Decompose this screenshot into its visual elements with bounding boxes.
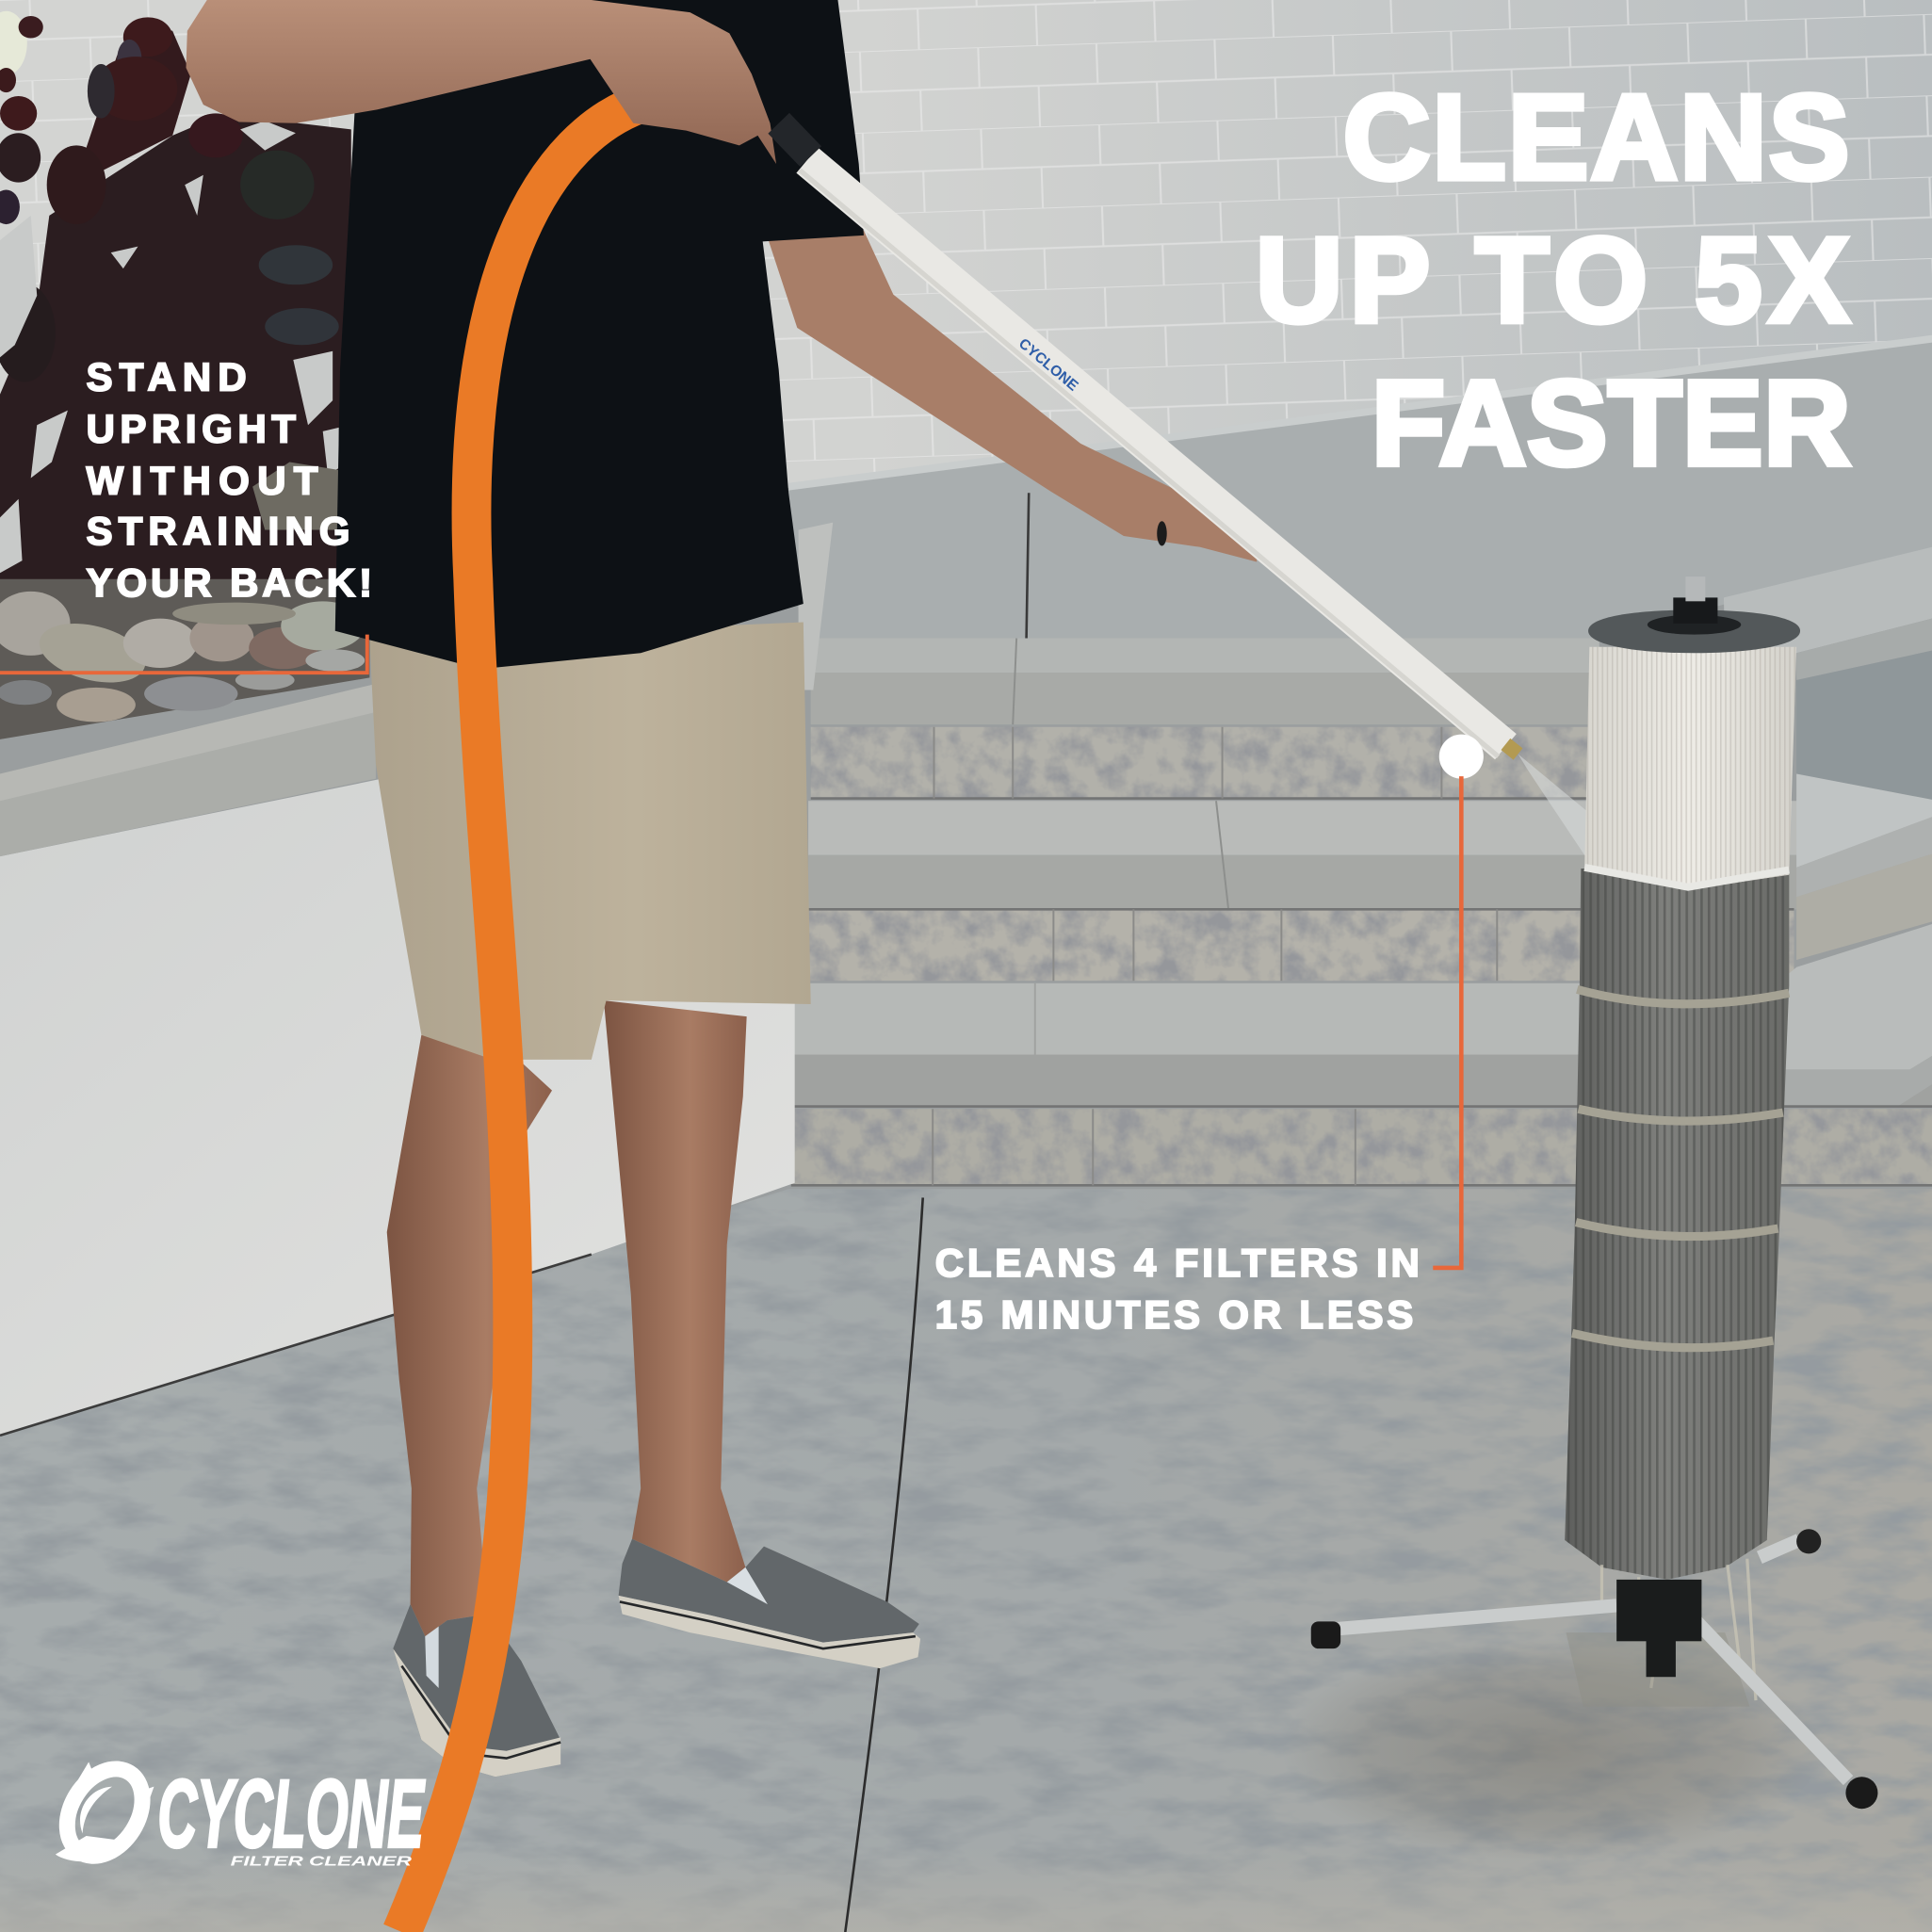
legs: [387, 1000, 747, 1636]
shorts: [369, 623, 811, 1060]
callout text: YOUR BACK!: [87, 560, 372, 605]
clean section: [1584, 647, 1796, 889]
rock bed: [0, 579, 369, 739]
callout text: WITHOUT: [87, 459, 318, 503]
headline: [1256, 71, 1851, 491]
cleaning wand: [779, 123, 1518, 756]
step three: [791, 983, 1932, 1055]
pool filter: [1565, 576, 1800, 1700]
person: [335, 0, 1257, 1777]
wand logo: CYCLONE: [1015, 335, 1081, 395]
callout leader line: [0, 635, 367, 673]
upper patio: [788, 340, 1932, 641]
foliage: [0, 11, 351, 604]
debris bands: [1572, 989, 1789, 1348]
black shirt: [335, 0, 864, 669]
ring: [1157, 521, 1167, 545]
callout: stand upright: [0, 355, 372, 673]
upper arm and hand: [187, 0, 776, 164]
base slab: [1567, 1632, 1749, 1707]
small ledge behind shirt: [799, 523, 833, 690]
step two: [808, 801, 1932, 855]
hose stub: [727, 104, 749, 121]
headline: CLEANS: [1343, 71, 1849, 205]
dirty section: [1565, 869, 1789, 1580]
planter wall: [0, 684, 795, 1436]
filter cap: [1588, 609, 1800, 653]
icon: swirl: [52, 1755, 157, 1870]
marker dot: [1439, 735, 1484, 779]
callout leader line: [1433, 776, 1461, 1268]
step one: [811, 639, 1599, 673]
callout text: STRAINING: [87, 509, 349, 553]
callout text: [935, 1241, 1420, 1337]
logo: [52, 1755, 426, 1870]
left shoe: [393, 1604, 560, 1777]
tripod stand: [1311, 1529, 1877, 1809]
orange hose: [401, 101, 648, 1932]
leaves: [0, 16, 351, 604]
callout text: 15 MINUTES OR LESS: [935, 1292, 1413, 1337]
wordmark: CYCLONE: [157, 1761, 426, 1868]
callout text: [87, 355, 372, 605]
tagline: FILTER CLEANER: [231, 1853, 412, 1869]
right shoe: [619, 1539, 919, 1643]
stone steps: [791, 523, 1932, 1185]
callout text: CLEANS 4 FILTERS IN: [935, 1241, 1420, 1285]
headline: UP TO 5X: [1256, 213, 1849, 348]
callout text: STAND: [87, 355, 247, 399]
shoes: [393, 1539, 920, 1777]
water drips: [1601, 1559, 1756, 1700]
extended arm: [768, 231, 1257, 561]
ground: [0, 1183, 1932, 1932]
brick wall: [0, 0, 1932, 592]
callout text: UPRIGHT: [87, 407, 296, 451]
callout: cleans 4 filters: [935, 735, 1484, 1337]
water spray: [1518, 755, 1589, 863]
wall gaps between leaves: [0, 121, 339, 573]
headline: FASTER: [1372, 356, 1851, 491]
hydrangea bloom: [0, 11, 27, 75]
